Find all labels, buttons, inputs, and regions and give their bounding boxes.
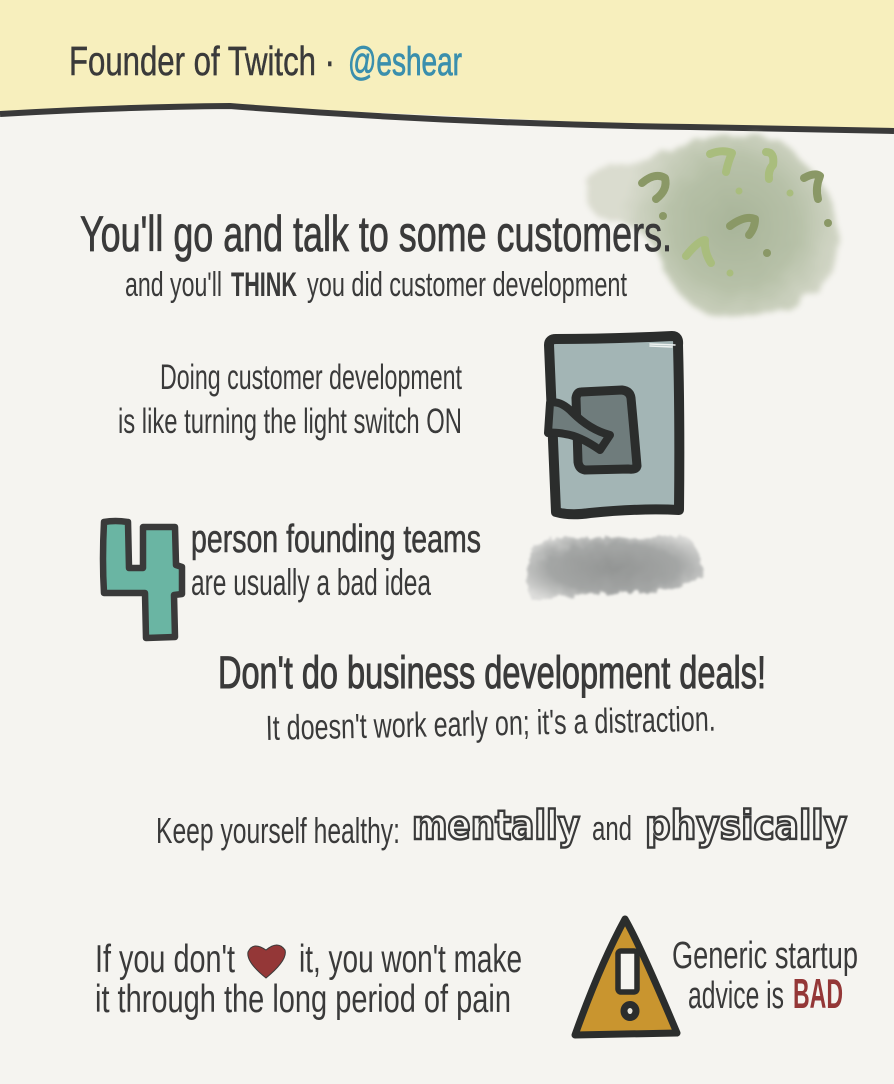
question marks	[642, 151, 832, 276]
generic advice text	[672, 935, 858, 1017]
love it text	[95, 938, 522, 1021]
light switch text	[118, 358, 462, 441]
green watercolor blot	[585, 135, 838, 316]
outlined word: physically: physically	[645, 803, 847, 849]
bad label: BAD	[793, 970, 843, 1017]
icon: warning triangle	[575, 919, 677, 1035]
icon: light switch	[548, 336, 679, 514]
healthy line: Keep yourself healthy:	[156, 810, 400, 851]
subline: think: and you'll	[125, 266, 222, 304]
healthy line: and	[592, 810, 632, 848]
outlined word: mentally: mentally	[412, 803, 580, 849]
subline: think: you did customer development	[307, 266, 627, 304]
large numeral 4	[103, 521, 182, 638]
founding teams text	[191, 518, 481, 603]
header band	[0, 0, 894, 131]
subline: distraction: It doesn't work early on; it's a distraction.	[265, 700, 716, 748]
love it text: If you don't	[95, 938, 235, 981]
light switch text: is like turning the light switch ON	[118, 402, 462, 441]
healthy line	[156, 803, 847, 851]
headline: customers: You'll go and talk to some customers.	[80, 206, 672, 262]
twitter handle: @eshear	[348, 40, 462, 84]
subline: think: THINK	[231, 266, 297, 304]
light switch text: Doing customer development	[160, 358, 462, 397]
founding teams text: person founding teams	[191, 518, 481, 561]
gray watercolor blot	[526, 536, 702, 600]
generic advice text: advice is	[688, 975, 784, 1017]
founding teams text: are usually a bad idea	[191, 562, 431, 603]
subline: think	[125, 266, 627, 304]
icon: heart	[248, 945, 285, 978]
love it text: it, you won't make	[299, 938, 522, 981]
love it text: it through the long period of pain	[95, 978, 511, 1021]
header title: Founder of Twitch ·	[69, 38, 335, 84]
